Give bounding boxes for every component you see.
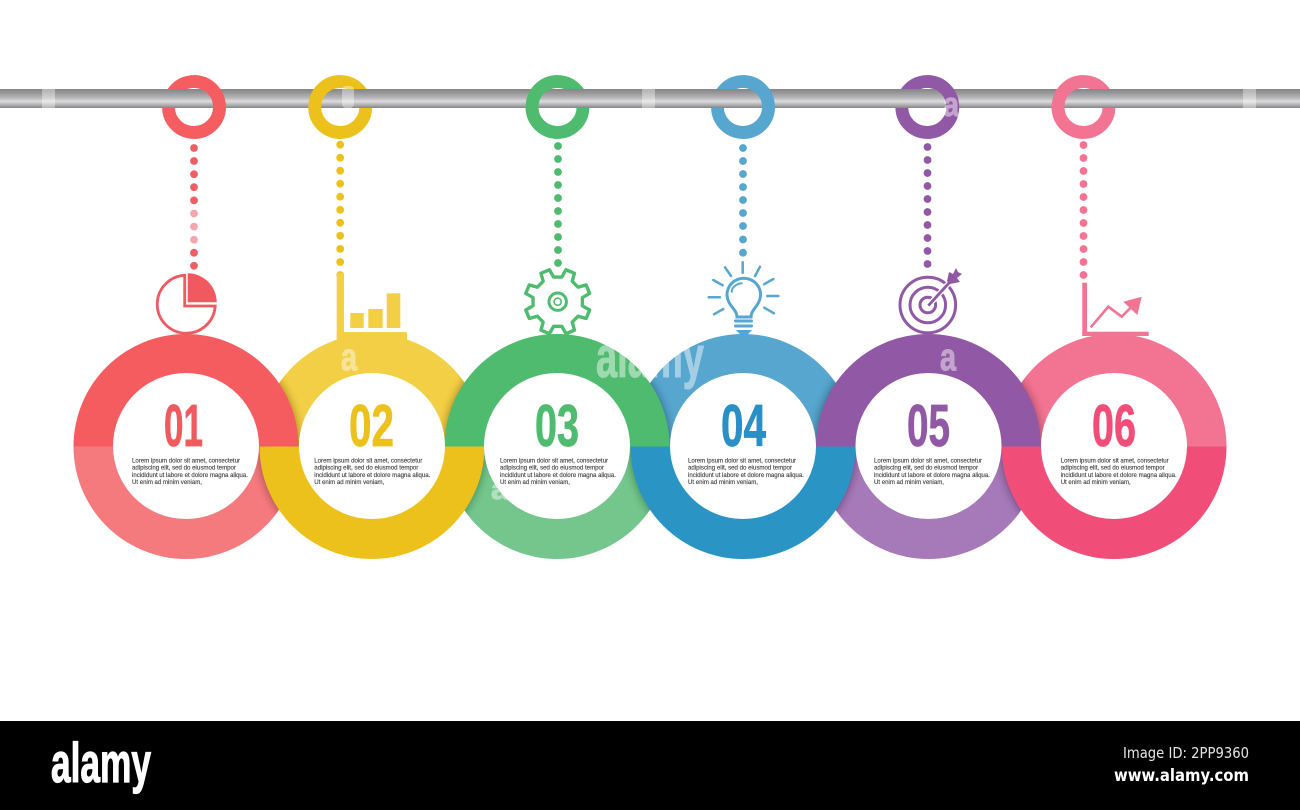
- icon: growth chart: [1082, 283, 1149, 336]
- footer bar: [0, 721, 1300, 810]
- watermark text: a: [341, 337, 358, 379]
- circle 04 centre: number and text: Lorem ipsum dolor sit amet, consectetur: [688, 457, 796, 464]
- circle 03 centre: number and text: Lorem ipsum dolor sit amet, consectetur: [500, 457, 608, 464]
- metal rod: [0, 89, 1300, 108]
- circle 05 centre: number and text: Ut enim ad minim veniam,: [874, 479, 944, 486]
- ring 02 lower half: [260, 446, 484, 559]
- dotted line 01: [190, 144, 198, 270]
- circle 06 centre: number and text: [1041, 373, 1187, 519]
- circle 04 centre: number and text: Ut enim ad minim veniam,: [688, 479, 758, 486]
- rod watermark patches: [42, 86, 1256, 108]
- ring 03 upper half: [444, 334, 670, 446]
- circle 03 centre: number and text: [484, 373, 630, 519]
- ring 05 upper half: [816, 334, 1041, 446]
- circle 03 centre: number and text: Ut enim ad minim veniam,: [500, 479, 570, 486]
- footer bar: alamy: [51, 731, 151, 794]
- circle 06 centre: number and text: incididunt ut labore et dolore magna aliqua.: [1061, 472, 1177, 479]
- watermark text: a: [491, 473, 509, 506]
- ring 02 upper half: [279, 340, 464, 446]
- circle 01 centre: number and text: incididunt ut labore et dolore magna aliqua.: [132, 472, 248, 479]
- circle 05 centre: number and text: incididunt ut labore et dolore magna aliqua.: [874, 472, 990, 479]
- dotted line 06: [1080, 141, 1087, 279]
- circle 04 centre: number and text: adipiscing elit, sed do eiusmod tempor: [688, 464, 792, 472]
- ring 06 upper half: [1021, 336, 1226, 446]
- circle 05 centre: number and text: Lorem ipsum dolor sit amet, consectetur: [874, 457, 982, 464]
- watermark text: alamy: [596, 325, 704, 390]
- circle 03 centre: number and text: adipiscing elit, sed do eiusmod tempor: [500, 464, 604, 472]
- ring 04 lower half: [630, 446, 856, 559]
- circle 01 centre: number and text: Lorem ipsum dolor sit amet, consectetur: [132, 457, 240, 464]
- footer bar: Image ID: 2PP9360: [1123, 744, 1249, 762]
- ring 01 upper half: [74, 334, 298, 446]
- icon: gear: [526, 270, 590, 334]
- ring 03 lower half: [464, 446, 650, 559]
- circle 01 centre: number and text: 01: [164, 393, 203, 459]
- circle 03 centre: number and text: incididunt ut labore et dolore magna aliqua.: [500, 472, 616, 479]
- circle 01 centre: number and text: adipiscing elit, sed do eiusmod tempor: [132, 464, 236, 472]
- circle 05 centre: number and text: [856, 373, 1002, 519]
- hanger ring fronts over the rod: [194, 82, 1084, 132]
- circle 06 centre: number and text: adipiscing elit, sed do eiusmod tempor: [1061, 464, 1165, 472]
- watermark text: a: [940, 337, 957, 379]
- dotted line 04: [739, 144, 747, 257]
- icon: pie chart: [157, 273, 217, 333]
- circle 05 centre: number and text: adipiscing elit, sed do eiusmod tempor: [874, 464, 978, 472]
- icon: target with arrow: [900, 268, 962, 333]
- circle 04 centre: number and text: incididunt ut labore et dolore magna aliqua.: [688, 472, 804, 479]
- circle 02 centre: number and text: incididunt ut labore et dolore magna aliqua.: [314, 472, 431, 479]
- watermark text: a: [943, 86, 960, 124]
- circle 05 centre: number and text: 05: [907, 393, 950, 459]
- circle 02 centre: number and text: Ut enim ad minim veniam,: [314, 479, 385, 486]
- ring 05 lower half: [836, 446, 1022, 559]
- ring 06 lower half: [1002, 446, 1226, 559]
- circle 02 centre: number and text: [299, 373, 445, 519]
- footer bar: www.alamy.com: [1114, 766, 1249, 785]
- icon: light bulb: [709, 262, 778, 334]
- icon: bar chart: [337, 273, 407, 340]
- circle 02 centre: number and text: adipiscing elit, sed do eiusmod tempor: [314, 464, 418, 472]
- dotted line 03: [554, 142, 562, 267]
- watermark text: [341, 86, 960, 506]
- circle 04 centre: number and text: 04: [721, 393, 766, 459]
- circle 06 centre: number and text: Lorem ipsum dolor sit amet, consectetur: [1061, 457, 1169, 464]
- circle 02 centre: number and text: Lorem ipsum dolor sit amet, consectetur: [314, 457, 422, 464]
- circle 01 centre: number and text: Ut enim ad minim veniam,: [132, 479, 202, 486]
- ring 01 lower half: [74, 446, 279, 559]
- circle 04 centre: number and text: [670, 373, 816, 519]
- circle 01 centre: number and text: [113, 373, 259, 519]
- dotted line 02: [336, 141, 344, 279]
- circle 03 centre: number and text: 03: [535, 393, 579, 459]
- circle 02 centre: number and text: 02: [349, 393, 394, 459]
- circle 06 centre: number and text: 06: [1092, 393, 1136, 459]
- ring 04 upper half: [650, 334, 836, 446]
- circle 06 centre: number and text: Ut enim ad minim veniam,: [1061, 479, 1131, 486]
- dotted line 05: [924, 143, 931, 268]
- hanger rings behind the rod: [168, 82, 1109, 132]
